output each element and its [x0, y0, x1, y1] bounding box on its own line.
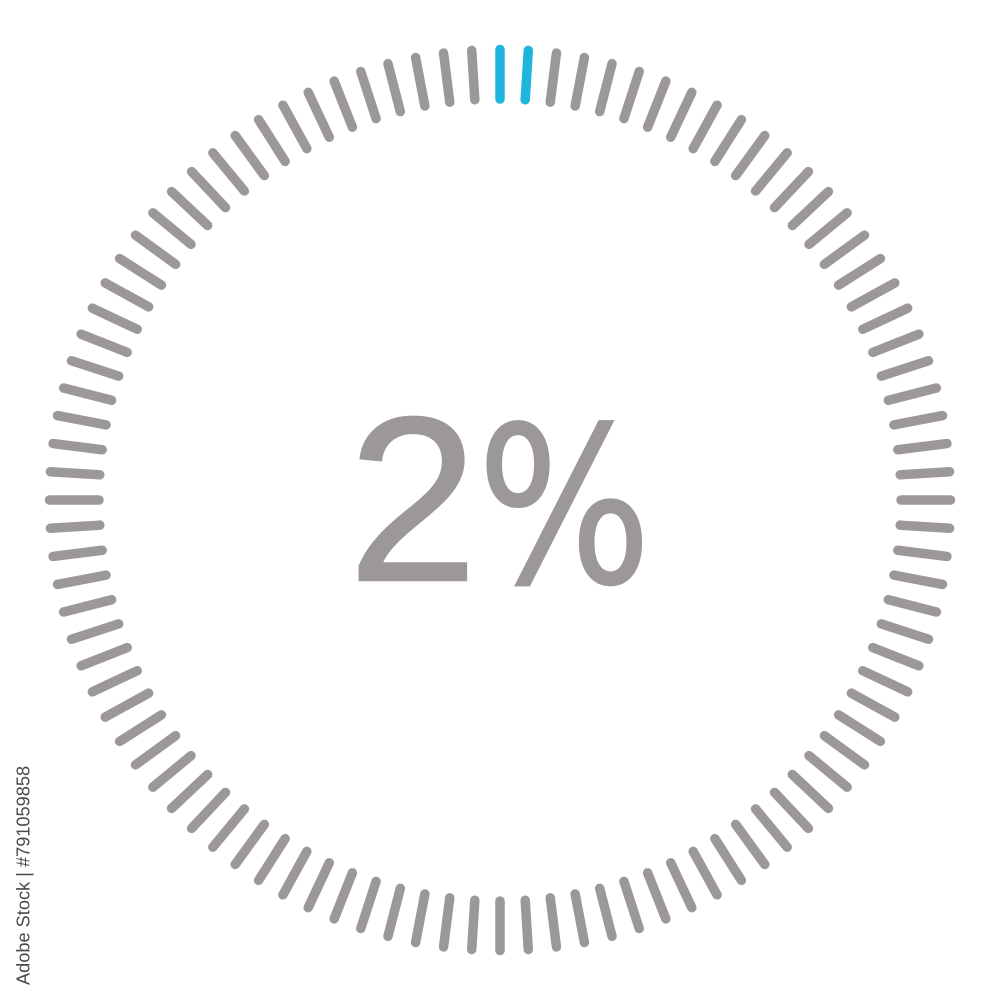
- progress ring: active blue ticks (2%): [500, 50, 528, 100]
- percentage label: [348, 368, 652, 634]
- percentage label: 2: [348, 368, 478, 630]
- stock image id caption: Adobe Stock | #791059858: [14, 766, 34, 985]
- percentage label: %: [477, 380, 652, 634]
